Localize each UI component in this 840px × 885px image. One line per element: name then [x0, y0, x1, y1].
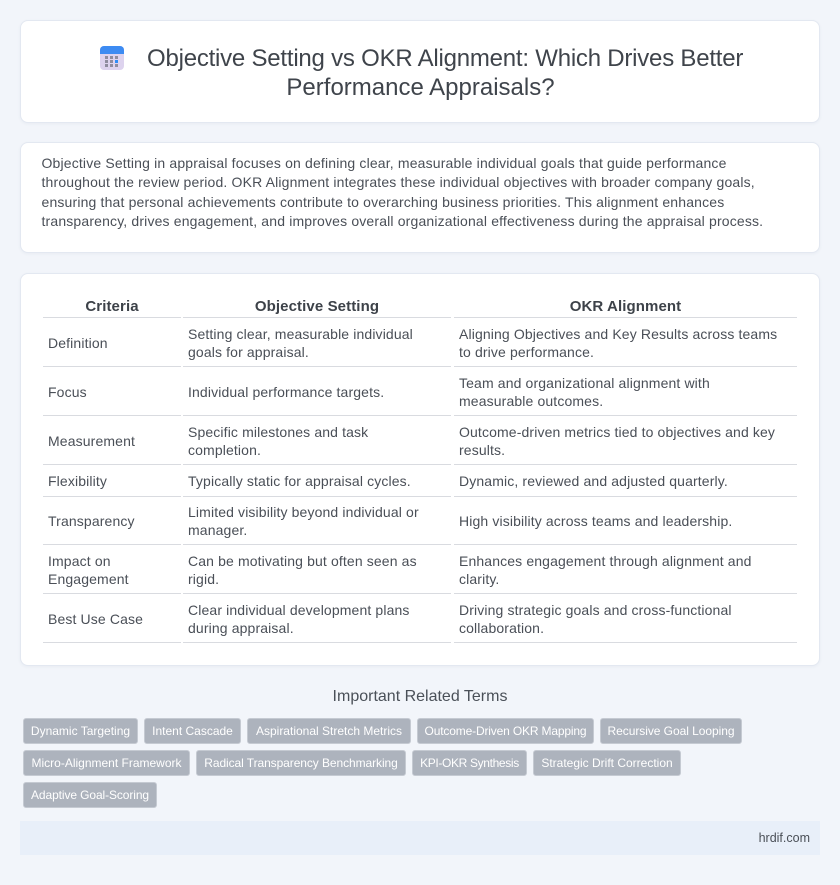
related term tags: Radical Transparency Benchmarking: [204, 756, 398, 770]
intro paragraph: [42, 155, 763, 229]
row: Definition: Definition: [48, 335, 108, 351]
related term tags: Outcome-Driven OKR Mapping: [425, 724, 586, 738]
related term tags: Strategic Drift Correction: [541, 756, 673, 770]
row: Measurement: results.: [459, 442, 505, 458]
row: Measurement: Measurement: [48, 433, 135, 449]
row: Focus: measurable outcomes.: [459, 393, 603, 409]
row: Best Use Case: during appraisal.: [188, 620, 294, 636]
row: Impact on Engagement: clarity.: [459, 571, 499, 587]
intro paragraph: ensuring that personal achievements contribute to overarching business priorities. This alignment enhances: [42, 194, 724, 210]
row: Best Use Case: Driving strategic goals and cross-functional: [459, 602, 732, 618]
row: Transparency: [48, 504, 732, 538]
row: Definition: [48, 326, 777, 360]
footer source: hrdif.com: [759, 831, 810, 845]
row: Flexibility: Dynamic, reviewed and adjusted quarterly.: [459, 473, 728, 489]
table header: Criteria: [85, 298, 139, 315]
title: [147, 45, 743, 101]
related term tags: Adaptive Goal-Scoring: [31, 788, 149, 802]
row: Best Use Case: collaboration.: [459, 620, 544, 636]
row: Transparency: High visibility across teams and leadership.: [459, 513, 732, 529]
row: Focus: Team and organizational alignment with: [459, 375, 710, 391]
row: Measurement: Specific milestones and task: [188, 424, 368, 440]
row: Impact on Engagement: Engagement: [48, 571, 129, 587]
row: Transparency: Limited visibility beyond individual or: [188, 504, 419, 520]
row: Focus: [48, 375, 710, 409]
title: Performance Appraisals?: [286, 74, 555, 101]
related term tags: KPI-OKR Synthesis: [420, 756, 519, 770]
title: Objective Setting vs OKR Alignment: Which Drives Better: [147, 45, 743, 72]
row: Definition: to drive performance.: [459, 344, 594, 360]
row: Best Use Case: Clear individual development plans: [188, 602, 410, 618]
row: Flexibility: Typically static for appraisal cycles.: [188, 473, 411, 489]
row: Best Use Case: [48, 602, 732, 636]
panel: comparison table: [20, 273, 820, 666]
intro paragraph: transparency, drives engagement, and improves overall organizational effectiveness during the appraisal process.: [42, 213, 763, 229]
table header: [85, 298, 681, 315]
row: Measurement: completion.: [188, 442, 261, 458]
row: Focus: Focus: [48, 384, 87, 400]
table header: Objective Setting: [255, 298, 379, 315]
related term tags: Aspirational Stretch Metrics: [256, 724, 402, 738]
row: Impact on Engagement: Enhances engagement through alignment and: [459, 553, 752, 569]
footer bar: [20, 821, 820, 855]
intro paragraph: Objective Setting in appraisal focuses on defining clear, measurable individual goals that guide performance: [42, 155, 727, 171]
related term tags: Recursive Goal Looping: [608, 724, 734, 738]
related term tags: [23, 718, 742, 808]
row: Definition: Setting clear, measurable individual: [188, 326, 413, 342]
related term tags: Intent Cascade: [152, 724, 233, 738]
row: Flexibility: Flexibility: [48, 473, 107, 489]
header card: [20, 20, 820, 123]
row: Impact on Engagement: Impact on: [48, 553, 111, 569]
related term tags: Micro-Alignment Framework: [31, 756, 182, 770]
heading: Important Related Terms: Important Related Terms: [333, 688, 507, 705]
row: Definition: goals for appraisal.: [188, 344, 309, 360]
intro paragraph: throughout the review period. OKR Alignment integrates these individual objectives with broader company goals,: [42, 174, 755, 190]
row: Transparency: manager.: [188, 522, 247, 538]
row: Impact on Engagement: rigid.: [188, 571, 219, 587]
row: Focus: Individual performance targets.: [188, 384, 384, 400]
row: Measurement: [48, 424, 775, 458]
icon: calendar: [100, 46, 124, 70]
related term tags: Dynamic Targeting: [31, 724, 130, 738]
row: Transparency: Transparency: [48, 513, 135, 529]
row: Definition: Aligning Objectives and Key Results across teams: [459, 326, 777, 342]
intro text panel: [20, 142, 820, 253]
row: Impact on Engagement: Can be motivating but often seen as: [188, 553, 417, 569]
row: Impact on Engagement: [48, 553, 752, 587]
row: Measurement: Outcome-driven metrics tied to objectives and key: [459, 424, 775, 440]
row: Flexibility: [48, 473, 728, 489]
table header: OKR Alignment: [570, 298, 681, 315]
row: Best Use Case: Best Use Case: [48, 611, 143, 627]
